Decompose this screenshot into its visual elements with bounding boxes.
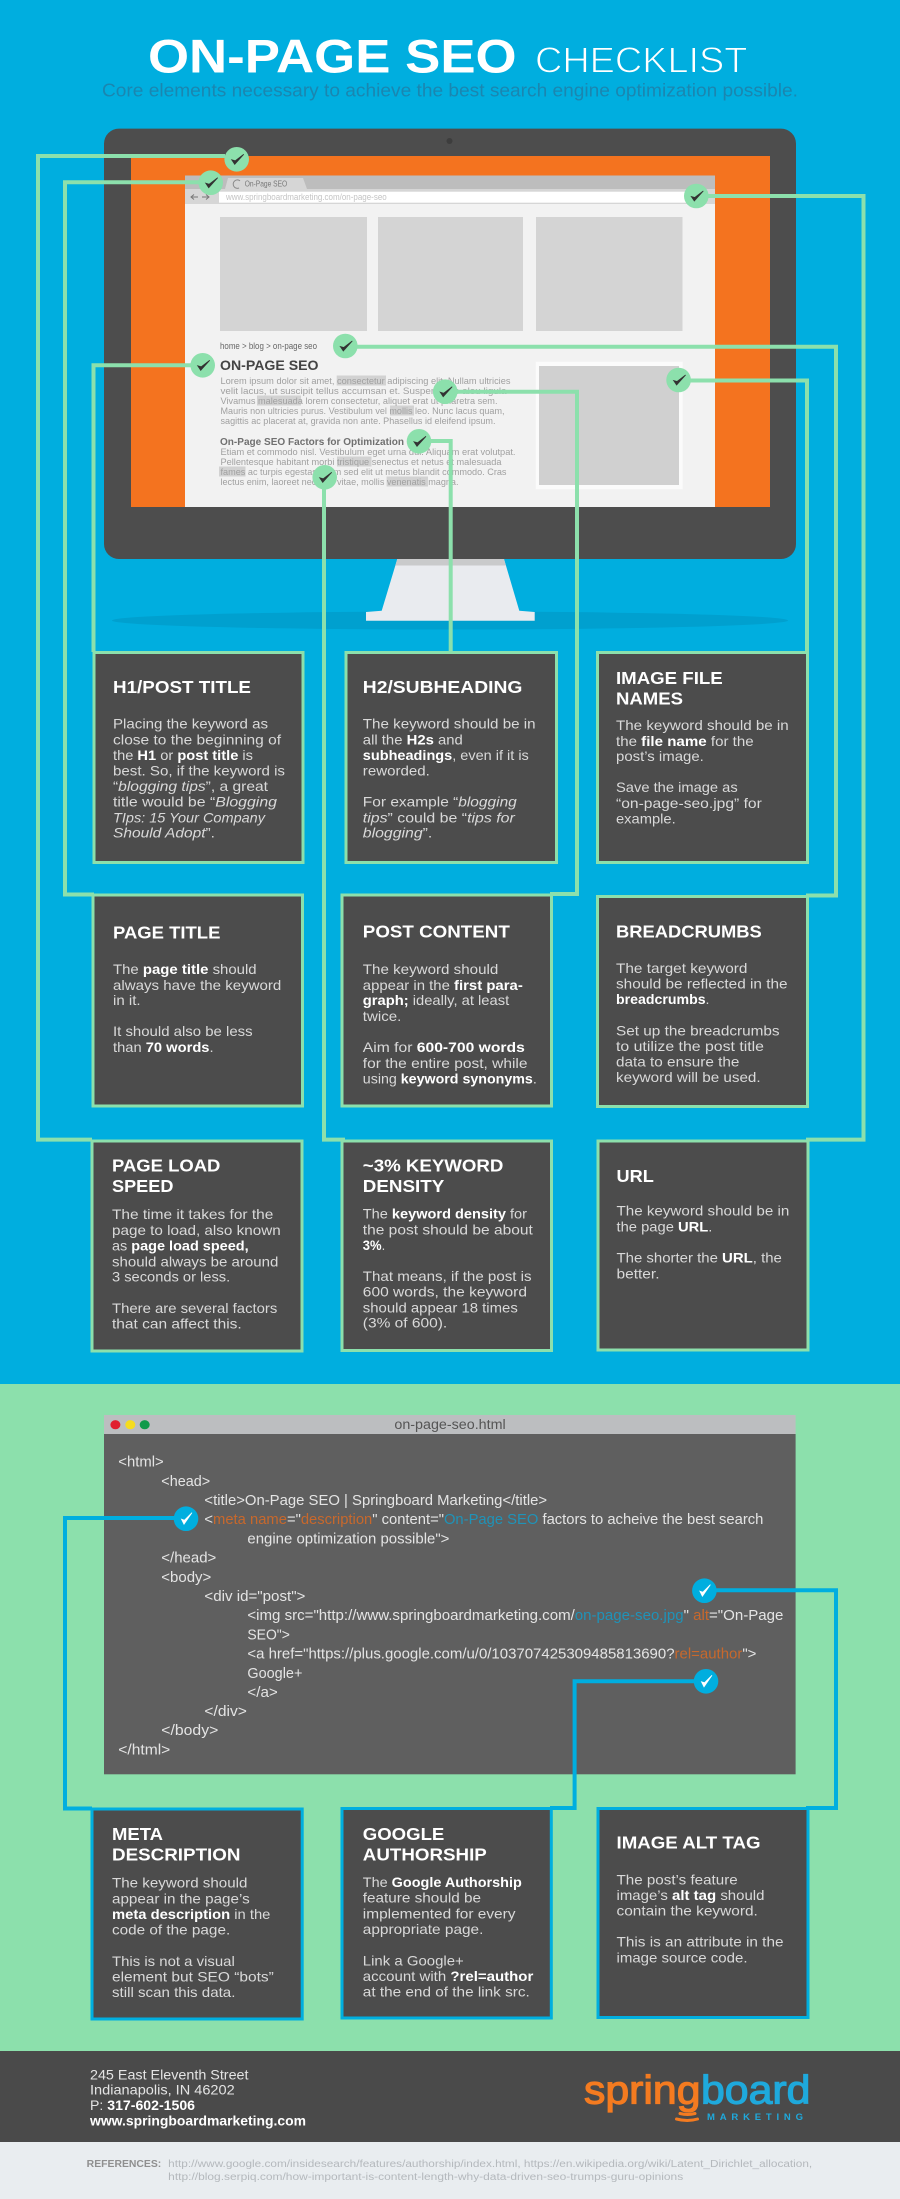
body text: appear in the first para- bbox=[363, 977, 523, 993]
connector: URL bbox=[708, 196, 864, 1140]
heading: SPEED bbox=[112, 1176, 174, 1196]
body text: should be reflected in the bbox=[616, 975, 788, 991]
references: http://blog.serpiq.com/how-important-is-content-length-why-data-driven-seo-trumps-guru-opinions bbox=[168, 2172, 683, 2183]
body text bbox=[113, 961, 281, 1055]
connector: page title bbox=[65, 182, 199, 895]
code lines: <body> bbox=[161, 1569, 212, 1586]
body text: feature should be bbox=[363, 1890, 481, 1906]
body text: Should Adopt ”. bbox=[113, 825, 215, 841]
body text: The Google Authorship bbox=[363, 1874, 522, 1890]
body text: appear in the page’s bbox=[112, 1890, 250, 1906]
body text: appropriate page. bbox=[363, 1921, 483, 1937]
body text: for the entire post, while bbox=[363, 1055, 528, 1071]
body text bbox=[616, 1871, 784, 1965]
footer band bbox=[0, 2051, 900, 2142]
icon: check authorship bbox=[694, 1669, 718, 1694]
heading: H1/POST TITLE bbox=[113, 677, 251, 697]
body text: image’s alt tag should bbox=[616, 1887, 764, 1903]
heading: POST CONTENT bbox=[363, 922, 510, 942]
body text: always have the keyword bbox=[113, 977, 281, 993]
lorem paragraph one: velit lacus, ut suscipit tellus accumsan et. Suspendisse aleu ligula bbox=[220, 386, 507, 397]
body text bbox=[616, 717, 789, 826]
body text: keyword will be used. bbox=[616, 1069, 761, 1085]
monitor shadow bbox=[112, 612, 788, 630]
body text: Aim for 600-700 words bbox=[363, 1039, 525, 1055]
panel: URL bbox=[598, 1141, 808, 1350]
footer address: 245 East Eleventh Street bbox=[90, 2066, 249, 2082]
lorem paragraph one bbox=[220, 376, 511, 427]
window title bar bbox=[104, 1415, 796, 1434]
code lines: <title>On-Page SEO | Springboard Marketing</title> bbox=[204, 1492, 547, 1509]
body text bbox=[616, 1203, 789, 1281]
body text: That means, if the post is bbox=[363, 1268, 532, 1284]
body text: twice. bbox=[363, 1008, 401, 1024]
heading bbox=[112, 1156, 221, 1196]
panel: H1/POST TITLE bbox=[94, 652, 303, 862]
connector: H2 subheading bbox=[431, 441, 451, 652]
body text bbox=[363, 961, 537, 1087]
lorem paragraph two: Pellentesque habitant morbi tristique senectus et netus et malesuada bbox=[220, 457, 502, 468]
body text bbox=[363, 716, 536, 841]
code lines: </div> bbox=[204, 1703, 247, 1720]
body text: code of the page. bbox=[112, 1922, 230, 1938]
body text: image source code. bbox=[616, 1949, 748, 1965]
body text bbox=[616, 960, 788, 1085]
body text bbox=[112, 1875, 274, 2000]
body text: element but SEO “bots” bbox=[112, 1969, 274, 1985]
body text: as page load speed, bbox=[112, 1238, 249, 1254]
code editor window bbox=[104, 1415, 796, 1774]
code lines: <div id="post"> bbox=[204, 1588, 306, 1605]
lorem paragraph one: Vivamus malesuada lorem consectetur, aliquet erat ut pharetra sem. bbox=[220, 396, 498, 407]
heading: AUTHORSHIP bbox=[363, 1844, 487, 1864]
body text: 600 words, the keyword bbox=[363, 1284, 527, 1300]
body text: the post should be about bbox=[363, 1221, 533, 1237]
breadcrumb text: home > blog > on-page seo bbox=[220, 341, 317, 352]
icon: check keyword density bbox=[312, 465, 337, 490]
code lines: </html> bbox=[118, 1742, 171, 1758]
body text: better. bbox=[616, 1265, 660, 1281]
heading: PAGE LOAD bbox=[112, 1156, 221, 1176]
heading bbox=[363, 1156, 504, 1196]
body text bbox=[112, 1206, 281, 1332]
body text: “blogging tips ”, a great bbox=[113, 778, 268, 794]
body text: implemented for every bbox=[363, 1905, 516, 1921]
body text: There are several factors bbox=[112, 1300, 277, 1316]
browser window bbox=[185, 176, 715, 507]
body text: close to the beginning of bbox=[113, 731, 281, 747]
logo: springboard marketing: MARKETING bbox=[707, 2112, 803, 2123]
body text: 3%. bbox=[363, 1237, 385, 1253]
icon: check page title bbox=[198, 170, 223, 195]
panel: IMAGE FILE NAMES bbox=[598, 652, 808, 862]
footer address: Indianapolis, IN 46202 bbox=[90, 2082, 235, 2098]
page H1: ON-PAGE SEO bbox=[220, 357, 319, 373]
code lines: </a> bbox=[247, 1684, 278, 1701]
panel: H2/SUBHEADING bbox=[346, 652, 556, 862]
heading: GOOGLE bbox=[363, 1824, 444, 1844]
camera bbox=[446, 138, 452, 144]
body text: The shorter the URL, the bbox=[616, 1250, 782, 1266]
panel: GOOGLE AUTHORSHIP bbox=[342, 1808, 551, 2018]
body text: to utilize the post title bbox=[616, 1038, 764, 1054]
references band bbox=[0, 2142, 900, 2199]
panel: META DESCRIPTION bbox=[92, 1809, 302, 2019]
lorem paragraph one: Lorem ipsum dolor sit amet, consectetur adipiscing elit. Nullam ultricies bbox=[220, 376, 511, 387]
monitor illustration bbox=[104, 129, 796, 630]
heading: URL bbox=[616, 1166, 654, 1186]
body text: The keyword should bbox=[363, 961, 498, 977]
body text: The keyword should be in bbox=[616, 1203, 789, 1219]
body text: 3 seconds or less. bbox=[112, 1269, 230, 1285]
body text: the file name for the bbox=[616, 733, 754, 749]
code lines: engine optimization possible"> bbox=[247, 1530, 450, 1548]
icon: check alt bbox=[692, 1578, 717, 1603]
body text: still scan this data. bbox=[112, 1984, 235, 2000]
body text: the H1 or post title is bbox=[113, 747, 253, 763]
body text: meta description in the bbox=[112, 1906, 271, 1922]
connector: meta description bbox=[65, 1518, 175, 1808]
logo: springboard marketing: spring bbox=[584, 2068, 700, 2112]
body text: The page title should bbox=[113, 961, 257, 977]
heading: IMAGE FILE bbox=[616, 668, 723, 688]
title: ON-PAGE SEO bbox=[148, 30, 517, 83]
icon: check H2 bbox=[407, 429, 431, 454]
body text: in it. bbox=[113, 992, 141, 1008]
body text: that can affect this. bbox=[112, 1316, 242, 1332]
address bar: www.springboardmarketing.com/on-page-seo bbox=[225, 192, 387, 202]
body text: (3% of 600). bbox=[363, 1315, 447, 1331]
heading: DESCRIPTION bbox=[112, 1844, 240, 1864]
body text: This is not a visual bbox=[112, 1953, 235, 1969]
subtitle: Core elements necessary to achieve the best search engine optimization possible. bbox=[102, 80, 798, 100]
heading: NAMES bbox=[616, 689, 683, 709]
connector: image alt tag bbox=[716, 1590, 836, 1808]
address bar bbox=[219, 192, 686, 203]
code lines: <a href="https://plus.google.com/u/0/103707425309485813690?rel=author"> bbox=[247, 1646, 757, 1662]
keyword highlights bbox=[219, 376, 428, 486]
icon: check image file bbox=[666, 368, 691, 392]
lorem paragraph two: fames ac turpis egestas. Nam sed elit ut metus blandit commodo. Cras bbox=[220, 467, 507, 478]
logo: springboard marketing bbox=[584, 2068, 810, 2123]
monitor stand bbox=[366, 559, 535, 621]
body text: example. bbox=[616, 810, 676, 826]
body text: best. So, if the keyword is bbox=[113, 762, 285, 778]
monitor bezel bbox=[104, 129, 796, 559]
body text: For example “ blogging bbox=[363, 794, 517, 810]
post image placeholder bbox=[536, 362, 683, 489]
body text: breadcrumbs. bbox=[616, 991, 710, 1007]
body text: reworded. bbox=[363, 762, 430, 778]
icon: check page load speed bbox=[224, 147, 249, 172]
body text: The post’s feature bbox=[616, 1871, 738, 1887]
body text: subheadings, even if it is bbox=[363, 747, 529, 763]
logo: springboard marketing: board bbox=[701, 2068, 810, 2112]
blue section background bbox=[0, 0, 900, 1384]
body text: The keyword should be in bbox=[363, 716, 536, 732]
panel: POST CONTENT bbox=[342, 895, 552, 1106]
body text: The keyword should be in bbox=[616, 717, 789, 733]
browser tab: On-Page SEO bbox=[245, 178, 287, 188]
heading bbox=[616, 668, 723, 709]
body text: Save the image as bbox=[616, 779, 738, 795]
body text: account with ?rel=author bbox=[363, 1968, 534, 1984]
code lines: SEO"> bbox=[247, 1626, 290, 1644]
body text: graph; ideally, at least bbox=[363, 992, 509, 1008]
connector: post content bbox=[457, 392, 577, 894]
code lines: <html> bbox=[118, 1454, 164, 1470]
lorem paragraph two: Etiam et commodo nisl. Vestibulum eget urna dui. Aliquam erat volutpat. bbox=[220, 447, 516, 458]
image placeholders bbox=[220, 217, 682, 331]
icon: check URL bbox=[684, 184, 709, 208]
icon: check meta bbox=[174, 1506, 198, 1531]
heading bbox=[363, 1824, 487, 1864]
references: REFERENCES: bbox=[87, 2159, 161, 2170]
panel: ~3% KEYWORD DENSITY bbox=[342, 1141, 552, 1350]
heading: BREADCRUMBS bbox=[616, 922, 762, 942]
references: http://www.google.com/insidesearch/features/authorship/index.html, https://en.wikipedia.org/wiki/Latent_Dirichlet_allocation, bbox=[168, 2159, 812, 2170]
lorem paragraph one: sagittis ac placerat at, gravida non ante. Phasellus id eleifend ipsum. bbox=[220, 416, 496, 427]
code lines: </body> bbox=[161, 1722, 219, 1739]
icon: check post content bbox=[433, 379, 458, 404]
heading: H2/SUBHEADING bbox=[363, 677, 522, 697]
body text bbox=[113, 716, 285, 841]
heading: DENSITY bbox=[363, 1176, 444, 1196]
heading: ~3% KEYWORD bbox=[363, 1156, 504, 1176]
body text: This is an attribute in the bbox=[616, 1934, 784, 1950]
code lines: <img src="http://www.springboardmarketing.com/on-page-seo.jpg" alt="On-Page bbox=[247, 1607, 783, 1624]
lorem paragraph two bbox=[220, 447, 516, 488]
panel: IMAGE ALT TAG bbox=[598, 1808, 808, 2018]
code lines: <meta name="description" content="On-Page SEO factors to acheive the best search bbox=[204, 1511, 763, 1528]
title: CHECKLIST bbox=[535, 40, 747, 81]
code lines: </head> bbox=[161, 1550, 217, 1566]
page H2: On-Page SEO Factors for Optimization bbox=[220, 436, 404, 448]
browser tab bbox=[225, 178, 307, 189]
icon: check breadcrumbs bbox=[333, 334, 358, 358]
connector: breadcrumbs bbox=[357, 347, 836, 896]
body text: Placing the keyword as bbox=[113, 716, 268, 732]
code lines: Google+ bbox=[247, 1665, 303, 1682]
body text bbox=[363, 1206, 533, 1331]
body text: Set up the breadcrumbs bbox=[616, 1022, 780, 1038]
footer address: P: 317-602-1506 bbox=[90, 2097, 195, 2113]
heading: IMAGE ALT TAG bbox=[616, 1833, 760, 1853]
body text bbox=[363, 1874, 534, 1999]
body text: at the end of the link src. bbox=[363, 1983, 530, 1999]
body text: tips” could be “ tips for bbox=[363, 809, 516, 825]
body text: data to ensure the bbox=[616, 1053, 740, 1069]
body text: TIps: 15 Your Company bbox=[113, 809, 266, 825]
body text: Link a Google+ bbox=[363, 1952, 464, 1968]
body text: using keyword synonyms. bbox=[363, 1071, 537, 1087]
body text: should always be around bbox=[112, 1253, 278, 1269]
body text: The keyword should bbox=[112, 1875, 247, 1891]
footer address: www.springboardmarketing.com bbox=[89, 2113, 306, 2129]
body text: “on-page-seo.jpg” for bbox=[616, 795, 762, 811]
body text: post’s image. bbox=[616, 748, 704, 764]
body text: should appear 18 times bbox=[363, 1299, 518, 1315]
heading bbox=[112, 1824, 240, 1864]
back and forward arrows bbox=[191, 194, 209, 200]
connector: google authorship bbox=[550, 1681, 695, 1808]
code lines bbox=[118, 1454, 783, 1758]
connector: image file names bbox=[690, 380, 807, 652]
lorem paragraph one: Mauris non ultricies purus. Vestibulum vel mollis leo. Nunc lacus quam, bbox=[220, 406, 504, 417]
body text: blogging ”. bbox=[363, 825, 432, 841]
heading: PAGE TITLE bbox=[113, 923, 221, 943]
lorem paragraph two: lectus enim, laoreet nec erat vitae, mollis venenatis magna. bbox=[220, 477, 458, 488]
panel: PAGE LOAD SPEED bbox=[92, 1141, 302, 1351]
code area bbox=[104, 1434, 796, 1774]
heading: META bbox=[112, 1824, 163, 1844]
body text: The time it takes for the bbox=[112, 1206, 274, 1222]
green section background bbox=[0, 1384, 900, 2051]
code lines: <head> bbox=[161, 1473, 210, 1490]
connector: keyword density bbox=[324, 489, 345, 1140]
body text: It should also be less bbox=[113, 1023, 253, 1039]
body text: title would be “ Blogging bbox=[113, 794, 277, 810]
footer address bbox=[89, 2066, 306, 2129]
panel: BREADCRUMBS bbox=[598, 896, 808, 1106]
body text: contain the keyword. bbox=[616, 1903, 758, 1919]
body text: than 70 words. bbox=[113, 1039, 214, 1055]
body text: the page URL. bbox=[616, 1218, 712, 1234]
references bbox=[87, 2159, 812, 2183]
connector: page load speed bbox=[38, 156, 225, 1140]
body text: page to load, also known bbox=[112, 1222, 281, 1238]
body text: all the H2s and bbox=[363, 731, 463, 747]
screen wallpaper bbox=[131, 156, 770, 507]
title bbox=[148, 30, 747, 83]
body text: The target keyword bbox=[616, 960, 747, 976]
window title bar: on-page-seo.html bbox=[394, 1417, 506, 1432]
icon: check H1 bbox=[190, 353, 215, 378]
body text: The keyword density for bbox=[363, 1206, 527, 1222]
connector: H1 post title bbox=[94, 365, 191, 652]
panel: PAGE TITLE bbox=[93, 895, 302, 1106]
